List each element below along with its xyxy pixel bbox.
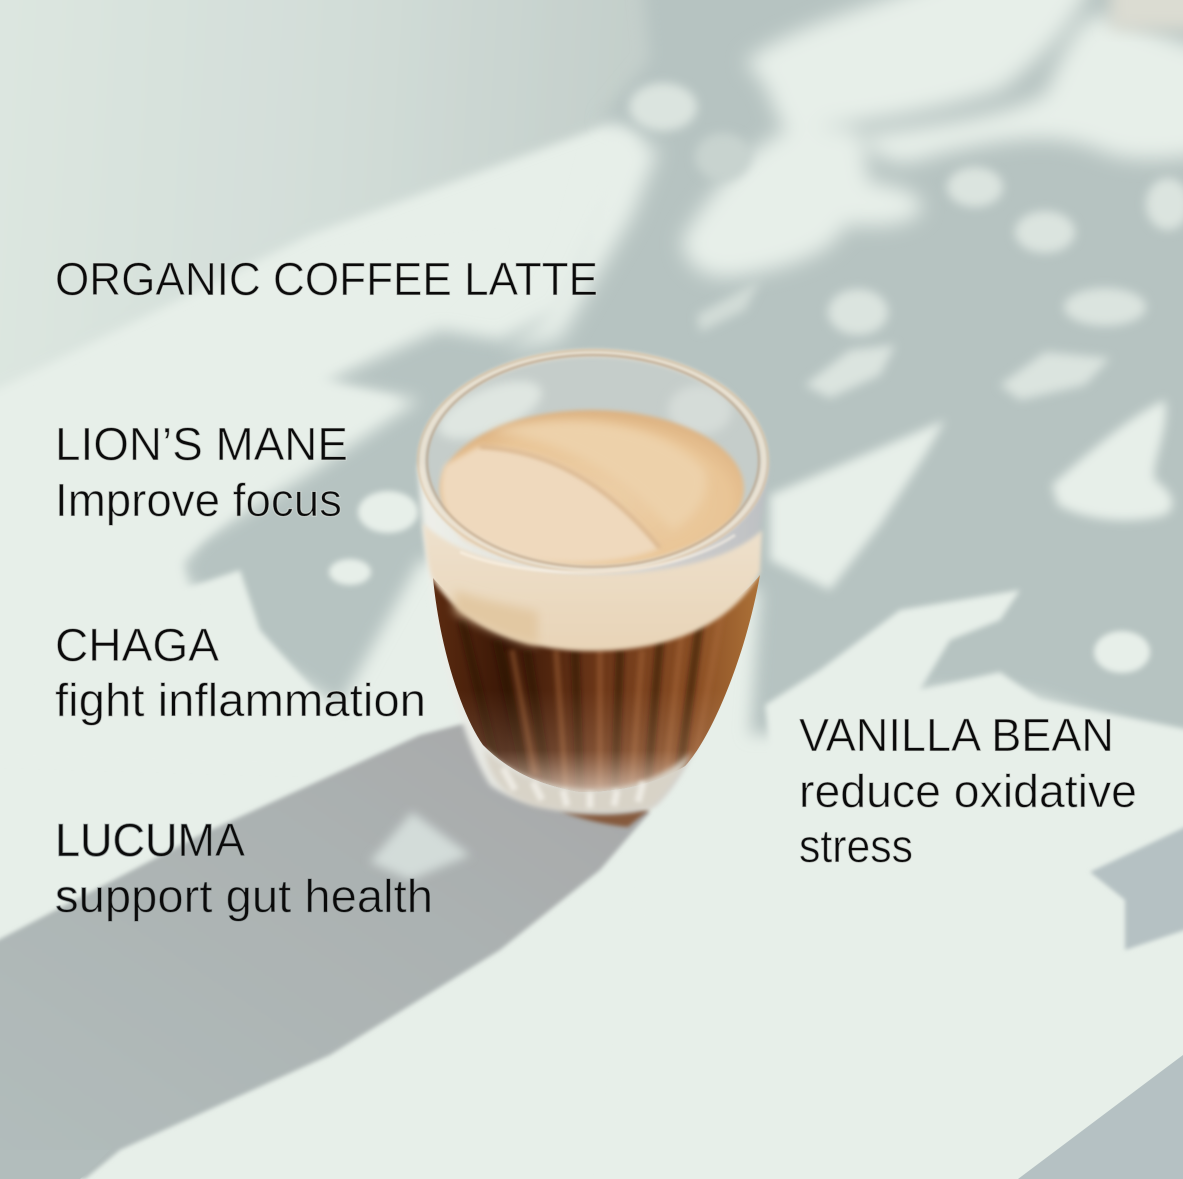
ingredient: vanilla bean: VANILLA BEAN [799,709,1114,761]
top blob [745,0,1095,128]
soft light dots [629,83,1183,400]
light refraction in cast shadow [370,812,470,880]
latte art ridges [441,447,660,563]
ingredient: vanilla bean: stress [799,820,913,872]
ingredient: lucuma [55,814,433,922]
second band [862,15,1183,162]
mid blob [682,125,922,277]
sunlit band left [0,240,500,700]
base reflection [560,809,650,827]
foam top [440,410,744,568]
ingredient: vanilla bean: reduce oxidative [799,765,1137,817]
icon: glass of layered latte [418,350,770,827]
ingredient: lucuma: LUCUMA [55,814,245,866]
wall in shade, top left [0,0,760,400]
ingredient: chaga: CHAGA [55,619,219,671]
milk base flutes [503,768,643,808]
ingredient: chaga: fight inflammation [55,674,426,726]
bottom right shadow [1018,1055,1183,1179]
cast shadow bottom edge [0,1150,110,1179]
title: ORGANIC COFFEE LATTE [55,253,598,305]
ingredient: chaga [55,619,426,726]
glass rim [422,353,764,569]
ingredient: lion's mane [55,418,348,526]
ingredient: lucuma: support gut health [55,870,433,922]
ingredient: lion's mane: LION’S MANE [55,418,348,470]
rim reflection [460,535,735,572]
fade to milk [464,705,718,792]
top right warm corner [1110,0,1183,30]
upper left patch beside shadow [505,122,658,350]
coffee layer [433,575,760,792]
dappled window shadow, upper right and centre [180,0,1183,790]
glass interior seen through rim [423,354,763,570]
glass ribs [458,620,712,785]
ingredient: vanilla bean [799,709,1137,872]
sun patches in the shadow [505,0,1183,350]
cast shadow of the glass [0,722,650,1179]
milk base [484,748,692,813]
right edge shadow [1090,820,1183,950]
glass body [418,465,768,811]
foam side [423,523,762,651]
ingredient: lion's mane: Improve focus [55,474,342,526]
